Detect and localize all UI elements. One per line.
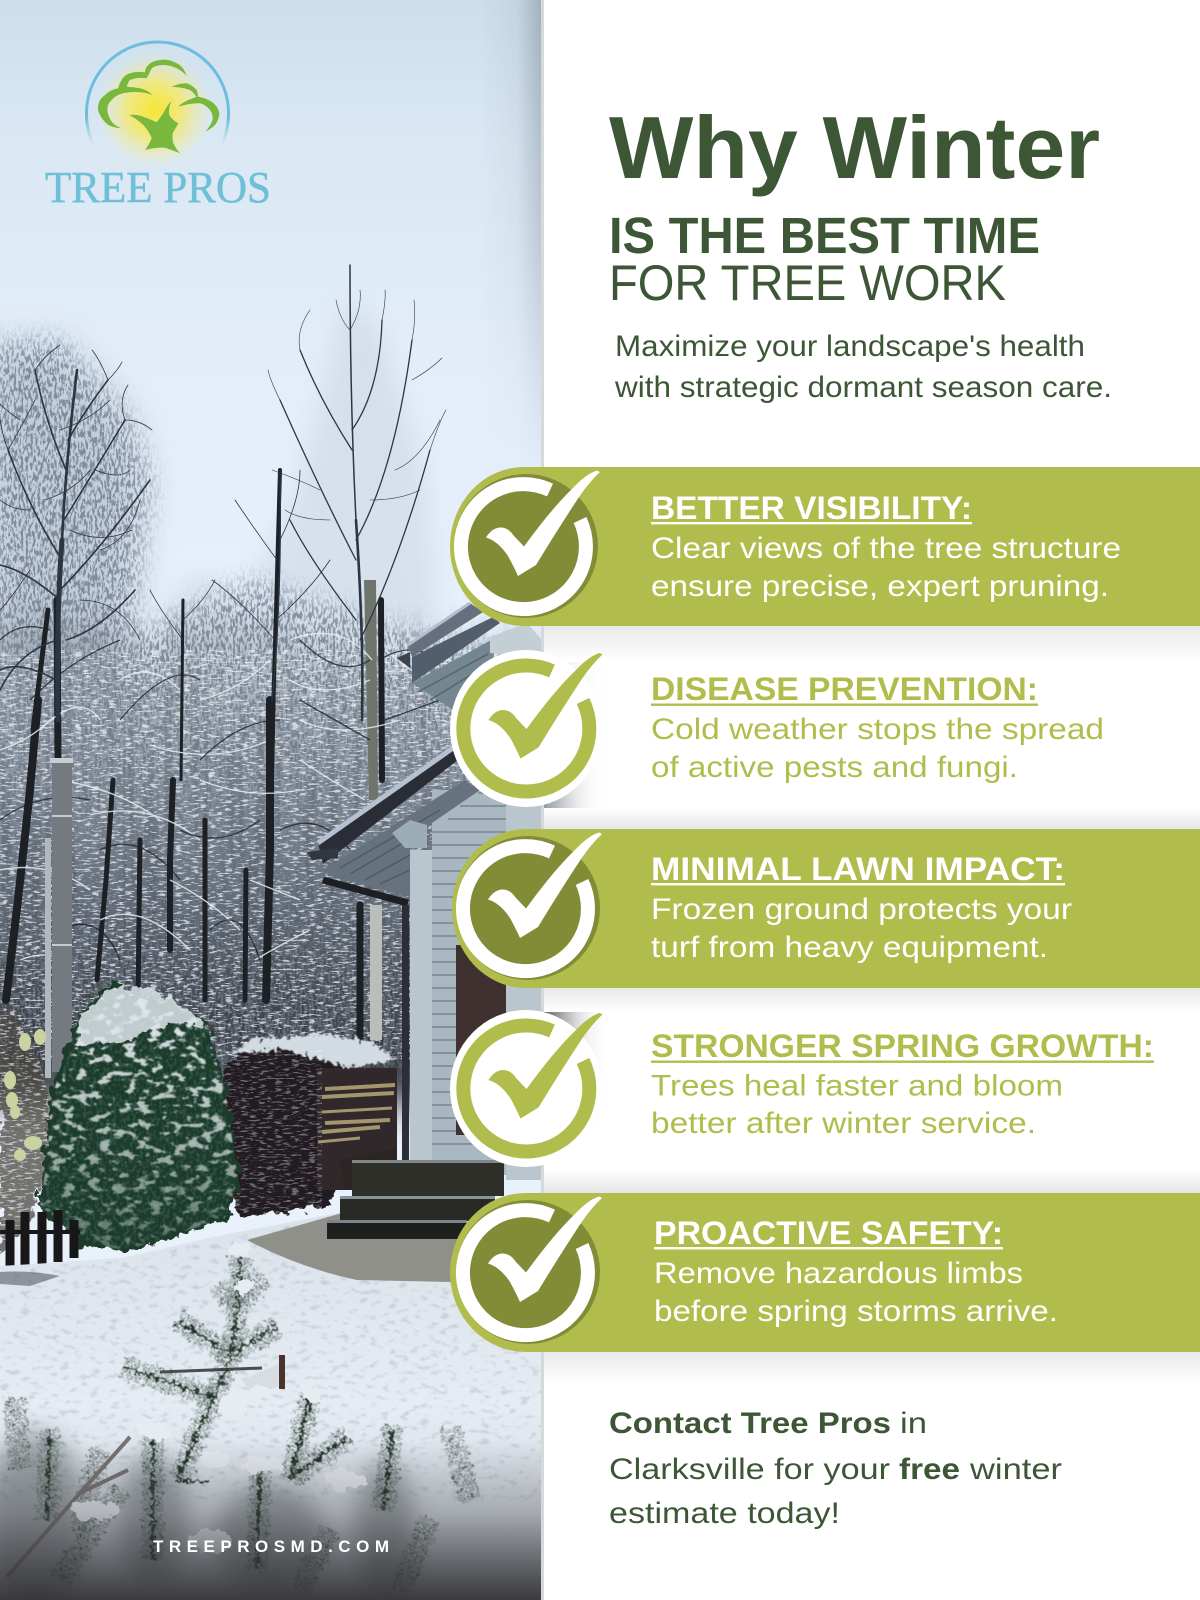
contact call to action: Clarksville for your [609, 1453, 890, 1486]
title: Why Winter: Why Winter [609, 98, 1100, 197]
panel: proactive safety [450, 1193, 1200, 1352]
bare trees [0, 265, 446, 720]
intro text: with strategic dormant season care. [614, 371, 1112, 404]
heading: BETTER VISIBILITY: [651, 490, 972, 526]
house [307, 603, 542, 1180]
description: turf from heavy equipment. [651, 931, 1048, 964]
subtitle regular: FOR TREE WORK [609, 255, 1006, 311]
logo: Tree Pros: TREE PROS [45, 163, 271, 212]
description [651, 893, 1072, 964]
intro text: Maximize your landscape's health [615, 330, 1085, 363]
icon: check badge [450, 650, 602, 807]
panel: stronger spring growth [450, 1010, 1154, 1167]
photo panel: snowy house and trees [0, 0, 560, 1600]
forest backdrop [0, 300, 560, 1100]
bush and woodpile [222, 1034, 398, 1220]
description [651, 1070, 1063, 1140]
description: Frozen ground protects your [651, 893, 1072, 926]
description: of active pests and fungi. [651, 751, 1018, 784]
pine mass shading [0, 1430, 415, 1600]
logo: Tree Pros [45, 42, 271, 212]
dark bottom gradient [0, 1440, 542, 1600]
garden post and plank [160, 1355, 285, 1396]
description: Trees heal faster and bloom [651, 1070, 1063, 1102]
description: Cold weather stops the spread [651, 713, 1104, 746]
icon: check badge [450, 467, 600, 626]
utility pole [45, 758, 73, 1078]
contact call to action: Contact Tree Pros [609, 1407, 891, 1440]
contact call to action: estimate today! [609, 1497, 840, 1530]
description: Clear views of the tree structure [651, 532, 1121, 565]
left shrub with pale leaves [0, 1005, 88, 1255]
description [651, 532, 1121, 603]
subtitle bold: IS THE BEST TIME [609, 207, 1040, 264]
heading: STRONGER SPRING GROWTH: [651, 1028, 1154, 1064]
panel: minimal lawn impact [452, 829, 1200, 988]
forest trunks [6, 470, 382, 1040]
heading: PROACTIVE SAFETY: [654, 1215, 1003, 1251]
description [654, 1257, 1058, 1328]
bare foreground branch [7, 1437, 130, 1577]
panel: disease prevention [450, 650, 1104, 807]
soft shadows behind white rows [544, 626, 1200, 1386]
spruce tree [37, 983, 240, 1253]
icon: check badge [450, 1010, 602, 1167]
fence [0, 1210, 80, 1266]
description: before spring storms arrive. [654, 1295, 1058, 1328]
title block [609, 98, 1112, 404]
young pine trees [15, 1258, 470, 1590]
contact call to action: in [900, 1407, 927, 1440]
snowy lawn [0, 1213, 542, 1600]
description: better after winter service. [651, 1107, 1036, 1140]
description: ensure precise, expert pruning. [651, 570, 1109, 603]
panel edge [541, 0, 544, 1600]
icon: check badge [452, 829, 602, 988]
description: Remove hazardous limbs [654, 1257, 1023, 1290]
intro text [614, 330, 1112, 404]
icon: check badge [450, 1193, 602, 1352]
heading: MINIMAL LAWN IMPACT: [651, 851, 1065, 887]
website address: TREEPROSMD.COM [153, 1537, 389, 1556]
panel: better visibility [450, 467, 1200, 626]
snow caps on pines [73, 1243, 365, 1552]
snowy forest branches [0, 633, 450, 960]
contact call to action: free [899, 1453, 960, 1486]
description [651, 713, 1104, 784]
contact call to action [609, 1407, 1062, 1530]
wooden steps [327, 1160, 504, 1239]
heading: DISEASE PREVENTION: [651, 671, 1038, 707]
contact call to action: winter [969, 1453, 1062, 1486]
